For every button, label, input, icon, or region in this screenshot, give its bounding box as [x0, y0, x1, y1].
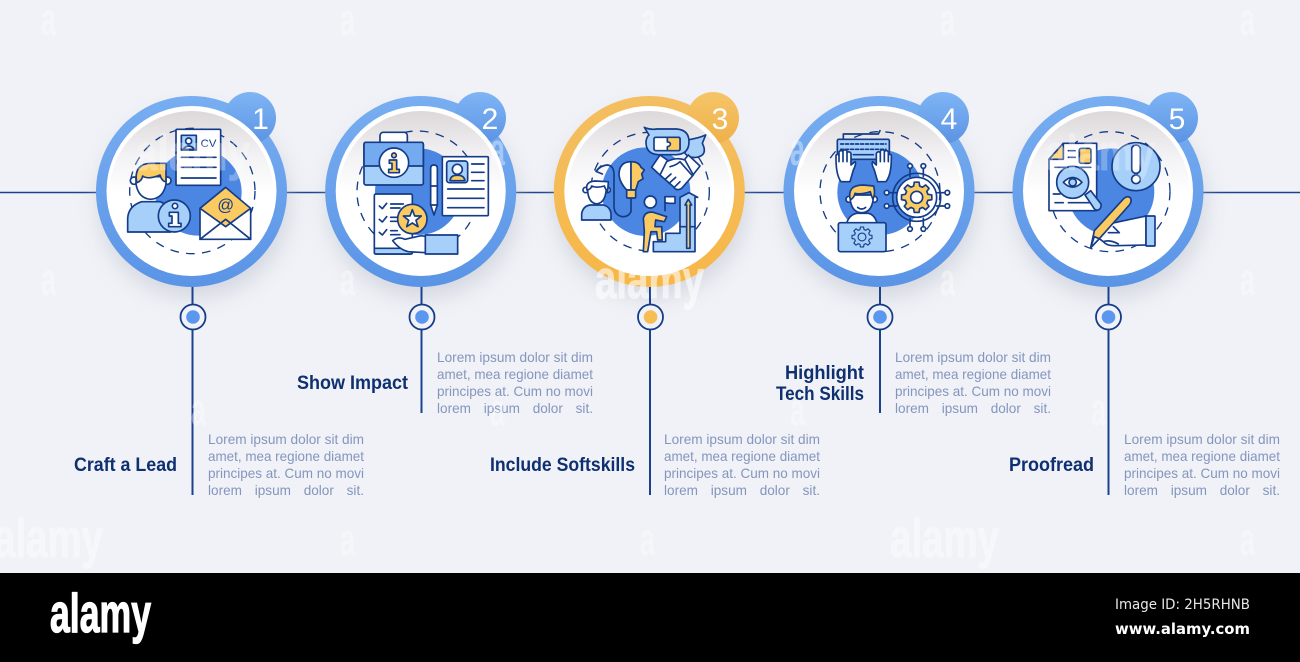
number 3: 3 — [712, 103, 728, 136]
text block 2: lorem ipsum dolor sit. — [437, 401, 593, 416]
heading: Highlight Tech Skills: Tech Skills — [776, 384, 864, 405]
shadow 5 — [1014, 110, 1206, 298]
number badge 1 — [224, 92, 276, 144]
shadow 1 — [98, 110, 290, 298]
watermarks: a — [41, 254, 57, 305]
step 4 — [784, 92, 977, 413]
watermarks: alamy — [595, 248, 704, 310]
connector line 5 — [1108, 284, 1110, 495]
watermarks: a — [640, 514, 656, 565]
inner disc 1 — [106, 106, 276, 276]
number badge 4 — [917, 92, 969, 144]
connector line 3 — [649, 284, 651, 495]
horizontal timeline line — [0, 192, 1300, 194]
connector line 1 — [192, 284, 194, 495]
node marker 4 — [868, 304, 892, 330]
step 2 — [325, 92, 519, 413]
website: www.alamy.com — [1115, 620, 1250, 638]
text block 3 — [664, 432, 820, 498]
text block 5: principes at. Cum no movi — [1124, 466, 1280, 481]
inner disc 5 — [1023, 106, 1193, 276]
icon: document, magnifier, alert, pen — [1049, 132, 1170, 252]
icon: CV, person, info, email: @ — [217, 196, 234, 215]
node marker 2 — [410, 304, 434, 330]
text block 1: Lorem ipsum dolor sit dim — [208, 432, 364, 447]
number badge 2 — [454, 92, 506, 144]
image id: Image ID: 2H5RHNB — [1115, 597, 1250, 613]
ring 1 — [96, 96, 287, 287]
text block 2: principes at. Cum no movi — [437, 384, 593, 399]
step 5 — [1012, 92, 1206, 495]
watermarks: alamy — [135, 125, 250, 181]
shadow 3 — [555, 110, 747, 298]
number 1: 1 — [252, 103, 269, 136]
heading: Craft a Lead: Craft a Lead — [74, 455, 177, 476]
icon: keyboard, developer, laptop, gear — [820, 131, 950, 252]
inner disc 2 — [336, 106, 506, 276]
ring 2 — [325, 96, 516, 287]
text block 5 — [1124, 432, 1280, 498]
text block 2: amet, mea regione diamet — [437, 367, 593, 382]
watermarks: a — [340, 514, 356, 565]
text block 3: amet, mea regione diamet — [664, 449, 820, 464]
text block 4: lorem ipsum dolor sit. — [895, 401, 1051, 416]
watermarks: a — [490, 124, 506, 175]
footer band — [0, 573, 1300, 662]
shadow 4 — [785, 110, 977, 298]
text block 4: Lorem ipsum dolor sit dim — [895, 350, 1051, 365]
node marker 5 — [1096, 304, 1121, 330]
watermarks: a — [790, 384, 806, 435]
connector line 4 — [879, 284, 881, 413]
watermarks: a — [191, 384, 207, 435]
text block 2: Lorem ipsum dolor sit dim — [437, 350, 593, 365]
watermarks: a — [1240, 254, 1256, 305]
text block 1: principes at. Cum no movi — [208, 466, 364, 481]
number 5: 5 — [1169, 103, 1185, 136]
step 3 — [554, 92, 747, 495]
text block 3: principes at. Cum no movi — [664, 466, 820, 481]
text block 3: Lorem ipsum dolor sit dim — [664, 432, 820, 447]
watermarks: a — [790, 124, 806, 175]
text block 2 — [437, 350, 593, 416]
text block 4: amet, mea regione diamet — [895, 367, 1051, 382]
number 2: 2 — [482, 103, 498, 136]
inner disc 3 — [564, 106, 734, 276]
text block 1: amet, mea regione diamet — [208, 449, 364, 464]
text block 5: amet, mea regione diamet — [1124, 449, 1280, 464]
ring 5 — [1012, 96, 1204, 287]
inner disc 4 — [794, 106, 964, 276]
watermarks: a — [340, 254, 356, 305]
text block 3: lorem ipsum dolor sit. — [664, 483, 820, 498]
heading: Proofread: Proofread — [1009, 455, 1094, 476]
heading: Highlight Tech Skills — [776, 363, 865, 405]
number badge 5 — [1146, 92, 1198, 144]
alamy logo: alamy — [50, 582, 151, 644]
node marker 1 — [180, 304, 206, 330]
text block 4: principes at. Cum no movi — [895, 384, 1051, 399]
watermarks: alamy — [890, 507, 999, 569]
icon: teamwork, lightbulb, handshake, climber — [582, 127, 709, 252]
watermarks: a — [1240, 514, 1256, 565]
text block 1 — [208, 432, 364, 498]
heading: Show Impact: Show Impact — [297, 373, 409, 394]
watermarks: a — [1091, 384, 1107, 435]
number 4: 4 — [941, 103, 957, 136]
node marker 3 — [638, 304, 663, 330]
number badge 3 — [687, 92, 739, 144]
heading: Include Softskills: Include Softskills — [490, 455, 635, 476]
text block 1: lorem ipsum dolor sit. — [208, 483, 364, 498]
text block 4 — [895, 350, 1051, 416]
shadow 2 — [327, 110, 519, 298]
watermarks: a — [490, 384, 506, 435]
text block 5: lorem ipsum dolor sit. — [1124, 483, 1280, 498]
watermarks: alamy — [1045, 125, 1155, 181]
ring 4 — [784, 96, 974, 287]
text block 5: Lorem ipsum dolor sit dim — [1124, 432, 1280, 447]
icon: CV, person, info, email: CV — [201, 138, 217, 150]
ring 3 — [554, 96, 745, 287]
step 1 — [96, 92, 290, 495]
watermarks: a — [940, 254, 956, 305]
icon: briefcase, resume, checklist, star — [357, 131, 488, 254]
connector line 2 — [420, 284, 422, 413]
icon: CV, person, info, email — [128, 128, 255, 254]
heading: Highlight Tech Skills: Highlight — [785, 363, 865, 384]
